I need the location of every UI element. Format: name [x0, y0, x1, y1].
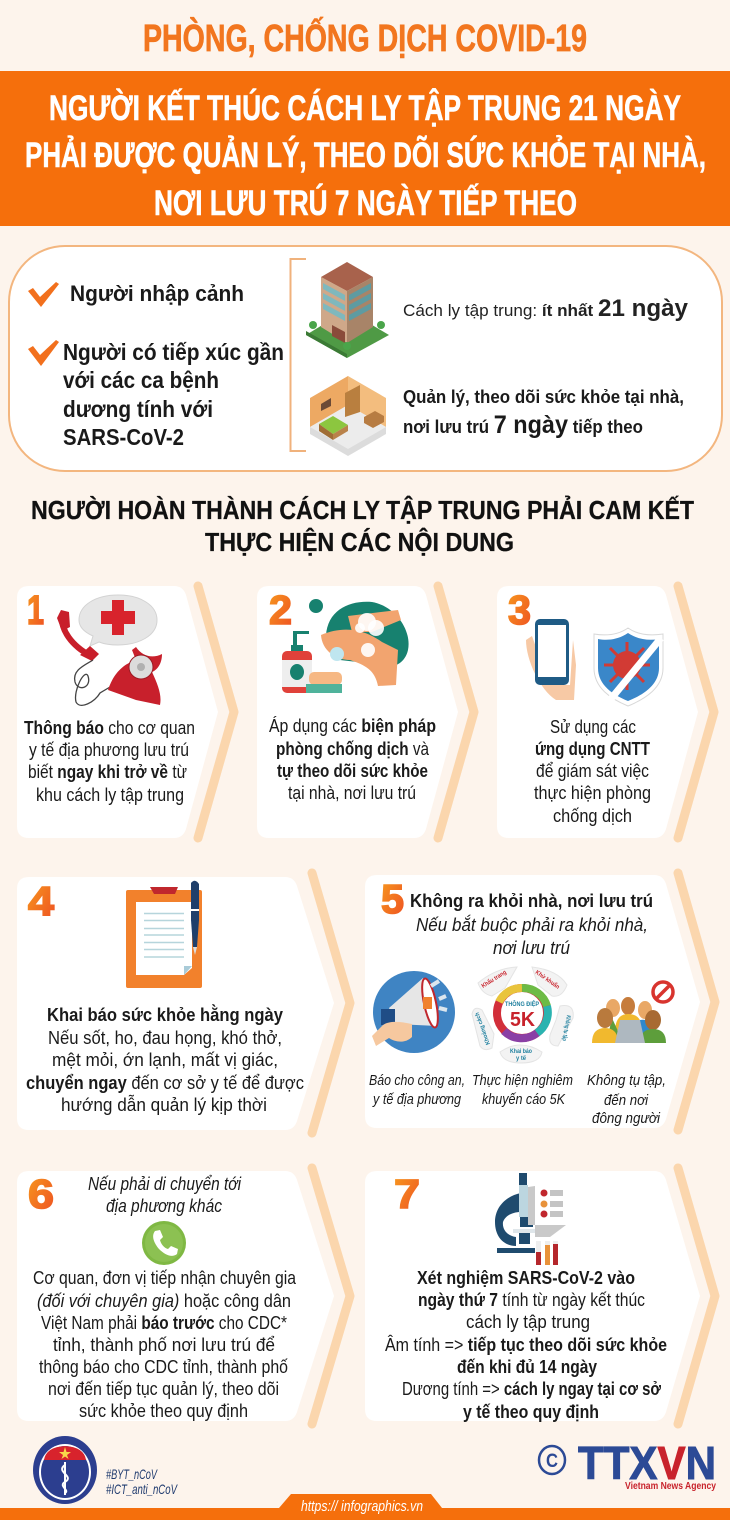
step 7 text: đến khi đủ 14 ngày [457, 1357, 597, 1377]
step 5 captions: Báo cho công an, [369, 1072, 465, 1089]
step 5 captions: Không tụ tập, [587, 1072, 666, 1089]
step 6 card [17, 1168, 350, 1424]
step 3 text: thực hiện phòng [534, 783, 651, 803]
step 5 heading: Không ra khỏi nhà, nơi lưu trú [410, 891, 653, 911]
step 2 text: Áp dụng các biện pháp [269, 716, 436, 736]
step 4 text: Nếu sốt, ho, đau họng, khó thở, [48, 1028, 282, 1048]
icon: 5K message wheel: Khoảng cách [475, 1011, 492, 1045]
icon: 5K message wheel: Khai báo [510, 1049, 532, 1055]
bracket [290, 259, 306, 451]
text: home monitoring [403, 387, 684, 439]
step 4 text: chuyển ngay đến cơ sở y tế để được [26, 1073, 304, 1093]
step 5 captions: y tế địa phương [372, 1091, 462, 1108]
step 5 condition: nơi lưu trú [493, 938, 570, 958]
icon: room at home [310, 376, 386, 456]
step 6 text: tỉnh, thành phố nơi lưu trú để [53, 1335, 275, 1355]
icon: telephone and medical bubble [57, 595, 162, 705]
section heading [31, 495, 694, 557]
step 1 card [17, 586, 234, 838]
footer bar with website tab: https:// infographics.vn [301, 1498, 423, 1515]
step 5 card [365, 873, 715, 1130]
icon: green phone [142, 1221, 186, 1265]
step 6 text: nơi đến tiếp tục quản lý, theo dõi [48, 1379, 279, 1399]
icon: 5K message wheel: Khẩu trang [480, 969, 508, 990]
step 4 text: Khai báo sức khỏe hằng ngày [47, 1004, 283, 1025]
section heading: THỰC HIỆN CÁC NỘI DUNG [205, 527, 514, 557]
footer bar with website tab [0, 1494, 730, 1520]
text: centralised quarantine duration: Cách ly tập trung: ít nhất 21 ngày [403, 295, 689, 322]
number 6: 6 [28, 1171, 54, 1217]
copyright symbol [539, 1446, 565, 1474]
logo: TTXVN: TTXVN [578, 1437, 716, 1489]
number 4: 4 [28, 878, 54, 924]
number 2: 2 [269, 587, 292, 633]
panel: quarantine summary [9, 246, 722, 471]
hashtags [106, 1466, 178, 1497]
text: home monitoring: nơi lưu trú 7 ngày tiếp theo [403, 411, 643, 439]
number 7: 7 [394, 1171, 420, 1217]
hashtags: #ICT_anti_nCoV [106, 1481, 178, 1497]
text: close contacts: dương tính với [63, 396, 213, 422]
step 6 text: (đối với chuyên gia) hoặc công dân [37, 1291, 291, 1311]
icon: 5K message wheel: Không tụ tập [560, 1015, 571, 1042]
step 5 captions: Thực hiện nghiêm [472, 1072, 573, 1089]
step 2 card [257, 586, 474, 838]
orange headline banner: NƠI LƯU TRÚ 7 NGÀY TIẾP THEO [154, 183, 577, 223]
step 3 text: Sử dụng các [550, 717, 636, 737]
step 5 captions [369, 1072, 666, 1127]
step 5 condition: Nếu bắt buộc phải ra khỏi nhà, [416, 915, 648, 935]
text: close contacts: SARS-CoV-2 [63, 424, 184, 450]
icon: check mark 2 [28, 340, 59, 366]
step 6 text: Cơ quan, đơn vị tiếp nhận chuyên gia [33, 1268, 297, 1288]
step 7 card [365, 1168, 715, 1424]
step 7 text: Dương tính => cách ly ngay tại cơ sở [402, 1379, 661, 1399]
step 1 text: Thông báo cho cơ quan [24, 718, 195, 738]
hashtags: #BYT_nCoV [106, 1466, 158, 1482]
step 5 condition [416, 915, 648, 958]
icon: no gathering [592, 982, 673, 1043]
number 3: 3 [508, 587, 531, 633]
copyright symbol: C [546, 1451, 558, 1472]
icon: 5K message wheel [472, 967, 573, 1063]
step 4 text: hướng dẫn quản lý kịp thời [61, 1094, 267, 1115]
number 5: 5 [381, 876, 404, 922]
title: PHÒNG, CHỐNG DỊCH COVID-19 [143, 15, 587, 60]
step 6 text: sức khỏe theo quy định [79, 1401, 248, 1421]
step 2 text: tại nhà, nơi lưu trú [288, 783, 416, 803]
number 1: 1 [27, 587, 44, 633]
icon: smartphone in hand [526, 619, 576, 700]
step 6 condition: Nếu phải di chuyển tới [88, 1174, 242, 1194]
step 1 text [24, 718, 195, 805]
step 7 text: y tế theo quy định [463, 1402, 599, 1422]
logo: ministry of health [33, 1436, 97, 1504]
step 3 text: để giám sát việc [536, 761, 649, 781]
step 6 text: thông báo cho CDC tỉnh, thành phố [39, 1357, 288, 1377]
text: entrants: Người nhập cảnh [70, 281, 244, 306]
step 3 card [497, 586, 714, 838]
step 1 text: khu cách ly tập trung [36, 785, 184, 805]
step 7 text: cách ly tập trung [466, 1312, 590, 1332]
text: close contacts: Người có tiếp xúc gần [63, 339, 284, 365]
step 2 text [269, 716, 436, 803]
step 3 text [534, 717, 651, 826]
step 2 text: phòng chống dịch và [276, 739, 430, 759]
icon: 5K message wheel: y tế [516, 1055, 527, 1062]
step 6 condition: địa phương khác [106, 1196, 222, 1216]
step 1 text: y tế địa phương lưu trú [29, 740, 189, 760]
step 4 text [26, 1004, 304, 1115]
icon: microscope and test tubes [495, 1173, 566, 1265]
orange headline banner [0, 71, 730, 226]
step 4 card [17, 873, 350, 1133]
icon: 5K message wheel: Khử khuẩn [534, 969, 561, 991]
step 1 text: biết ngay khi trở về từ [28, 762, 187, 782]
icon: megaphone [372, 971, 455, 1053]
step 5 captions: khuyến cáo 5K [482, 1091, 566, 1108]
icon: 5K message wheel: 5K [510, 1009, 536, 1031]
step 6 condition [88, 1174, 242, 1216]
logo: TTXVN: Vietnam News Agency [625, 1481, 716, 1492]
step 6 text [33, 1268, 297, 1421]
step 7 text: Xét nghiệm SARS-CoV-2 vào [417, 1268, 635, 1288]
step 7 text: ngày thứ 7 tính từ ngày kết thúc [418, 1290, 645, 1310]
step 7 text [385, 1268, 667, 1422]
icon: virus shield [594, 628, 663, 706]
step 4 text: mệt mỏi, ớn lạnh, mất vị giác, [52, 1050, 278, 1070]
step 6 text: Việt Nam phải báo trước cho CDC* [41, 1313, 287, 1333]
step 3 text: chống dịch [553, 806, 632, 826]
icon: quarantine building [306, 262, 389, 358]
icon: hand washing with soap [282, 599, 409, 693]
step 3 text: ứng dụng CNTT [535, 739, 650, 759]
step 5 captions: đến nơi [604, 1092, 649, 1109]
icon: check mark 1 [28, 282, 59, 307]
step 7 text: Âm tính => tiếp tục theo dõi sức khỏe [385, 1335, 667, 1355]
text: close contacts [63, 339, 284, 450]
step 2 text: tự theo dõi sức khỏe [277, 761, 428, 781]
text: close contacts: với các ca bệnh [63, 367, 219, 393]
text: home monitoring: Quản lý, theo dõi sức khỏe tại nhà, [403, 387, 684, 407]
icon: clipboard and pen [126, 881, 202, 988]
step 5 captions: đông người [592, 1110, 661, 1127]
icon: 5K message wheel: THÔNG ĐIỆP [505, 1000, 539, 1008]
